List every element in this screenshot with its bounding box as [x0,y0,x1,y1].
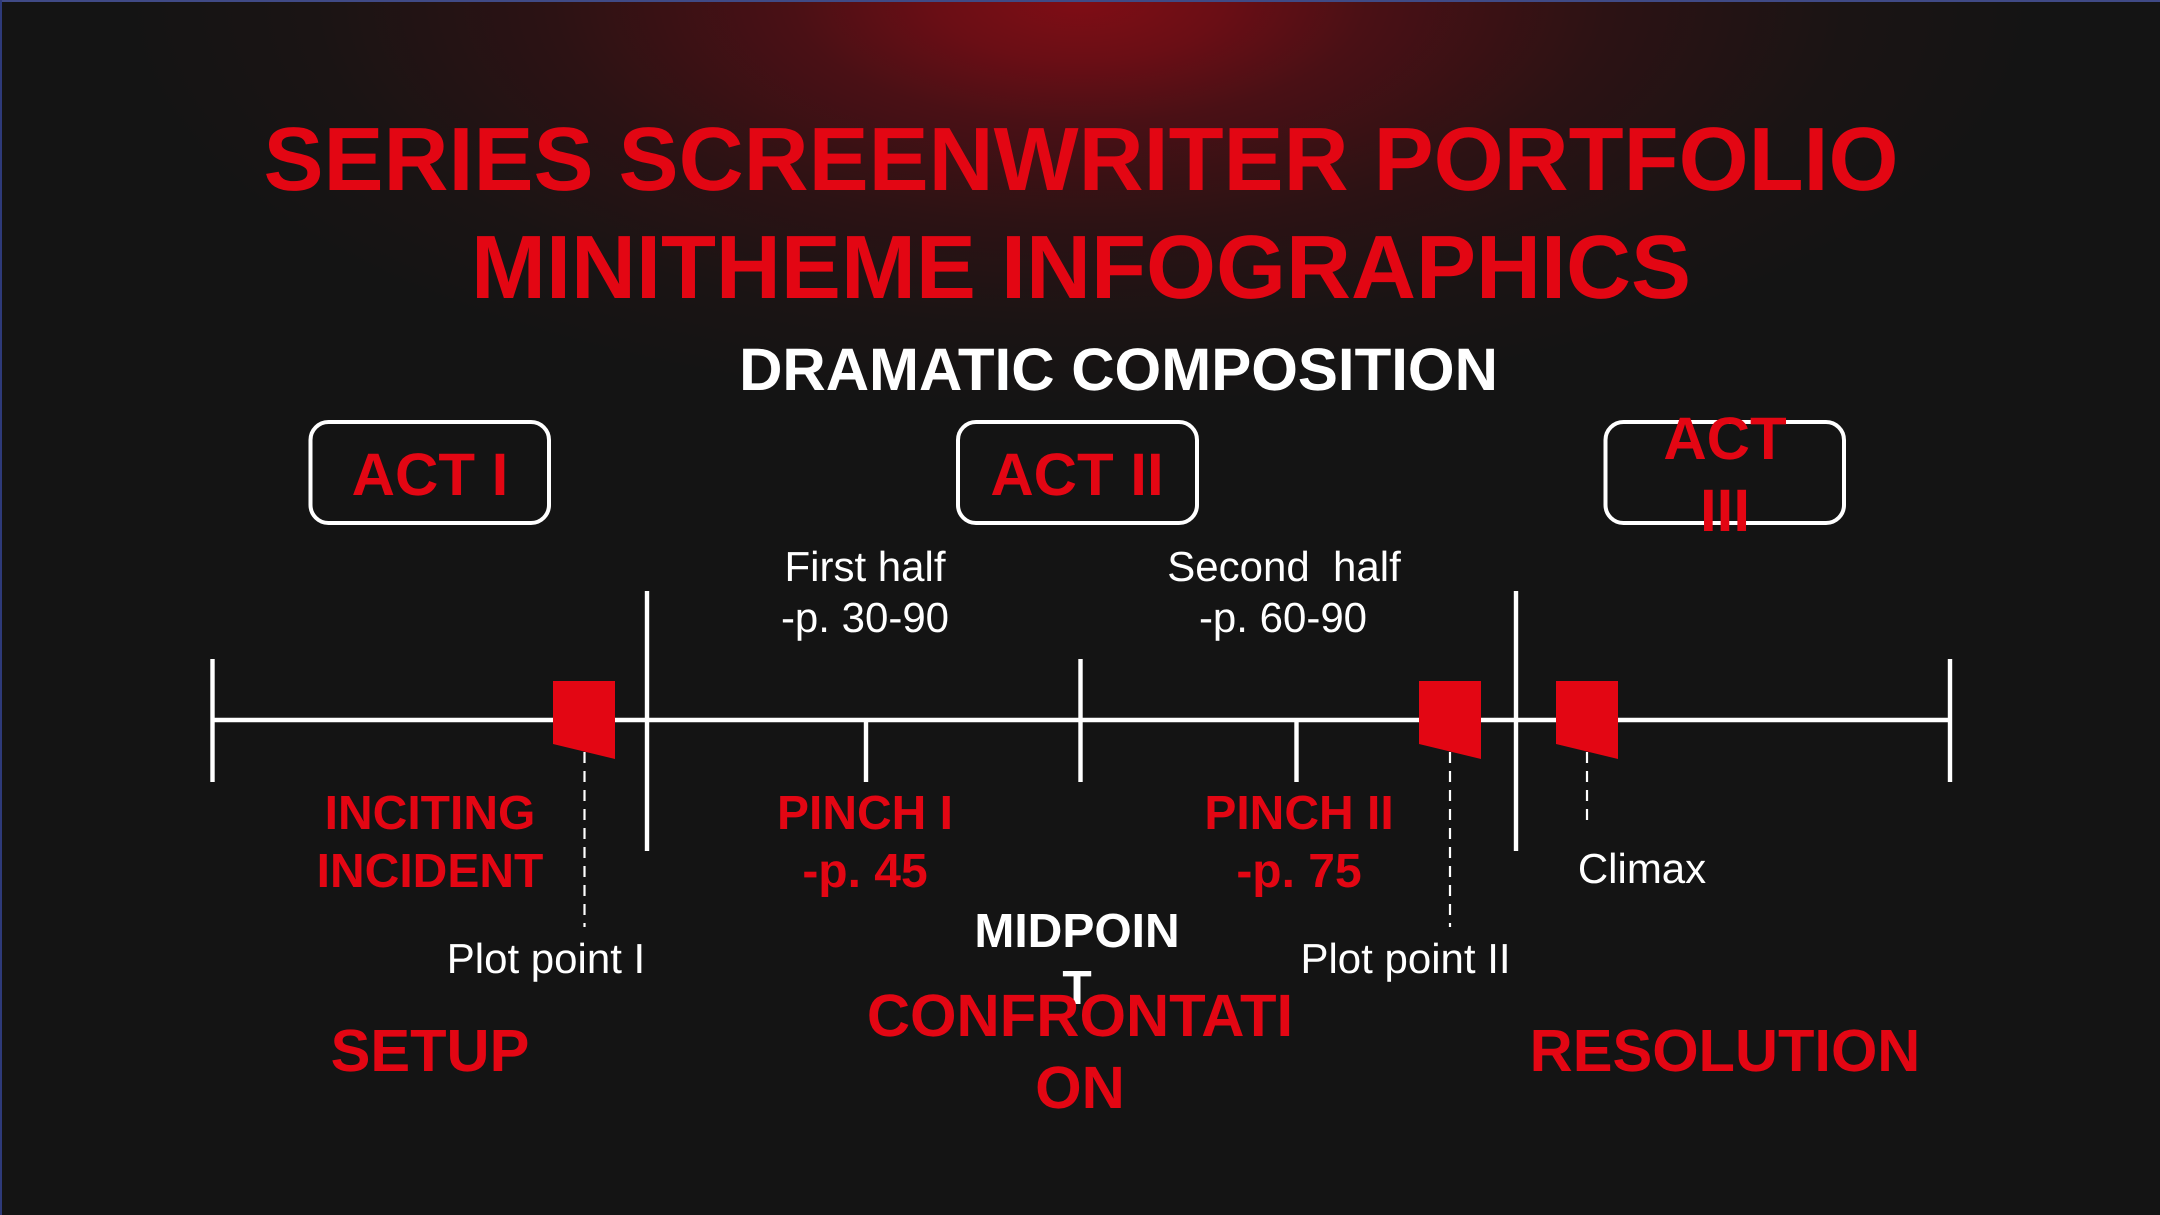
label: pinch I: PINCH I [777,787,953,840]
label: plot point I: Plot point I [447,935,645,982]
label: pinch II: PINCH II [1204,787,1394,840]
text: second half range: -p. 60-90 [1199,594,1367,641]
panel: act III box: III [1700,477,1750,544]
label: midpoint: T [1062,962,1092,1015]
label: pinch II: -p. 75 [1236,845,1362,898]
icon: flag plot point I [553,681,615,759]
timeline axis with ticks [212,591,1950,851]
label: pinch I [777,787,953,898]
text: first half range: First half [784,543,946,590]
panel: act III box: ACT [1663,405,1787,472]
icon: flag climax [1556,681,1618,759]
title: SERIES SCREENWRITER PORTFOLIO [263,110,1899,210]
label: midpoint: MIDPOIN [974,905,1180,958]
label: setup: SETUP [331,1017,529,1084]
label: inciting incident [317,787,543,898]
dashed leader: plot point I [583,752,586,927]
panel: act III box [1606,405,1844,544]
label: confrontation [867,982,1293,1121]
label: plot point II: Plot point II [1300,935,1511,982]
subtitle: DRAMATIC COMPOSITION [739,336,1498,403]
label: pinch II [1204,787,1394,898]
text: first half range: -p. 30-90 [781,594,949,641]
label: confrontation: CONFRONTATI [867,982,1293,1049]
panel: act I box [310,422,549,523]
panel: act II box [958,422,1197,523]
label: inciting incident: INCIDENT [317,845,543,898]
label: midpoint [974,905,1180,1015]
text: second half range [1167,543,1401,641]
panel: act II box: ACT II [990,441,1164,508]
title [263,110,1899,318]
text: second half range: Second half [1167,543,1401,590]
label: inciting incident: INCITING [325,787,535,840]
panel: act I box: ACT I [352,441,508,508]
label: resolution: RESOLUTION [1530,1017,1920,1084]
title: MINITHEME INFOGRAPHICS [471,218,1691,318]
dashed leader: climax [1586,752,1588,822]
icon: flag plot point II [1419,681,1481,759]
label: climax: Climax [1578,845,1706,892]
label: pinch I: -p. 45 [802,845,928,898]
text: first half range [781,543,949,641]
dashed leader: plot point II [1449,752,1451,927]
label: confrontation: ON [1035,1054,1125,1121]
